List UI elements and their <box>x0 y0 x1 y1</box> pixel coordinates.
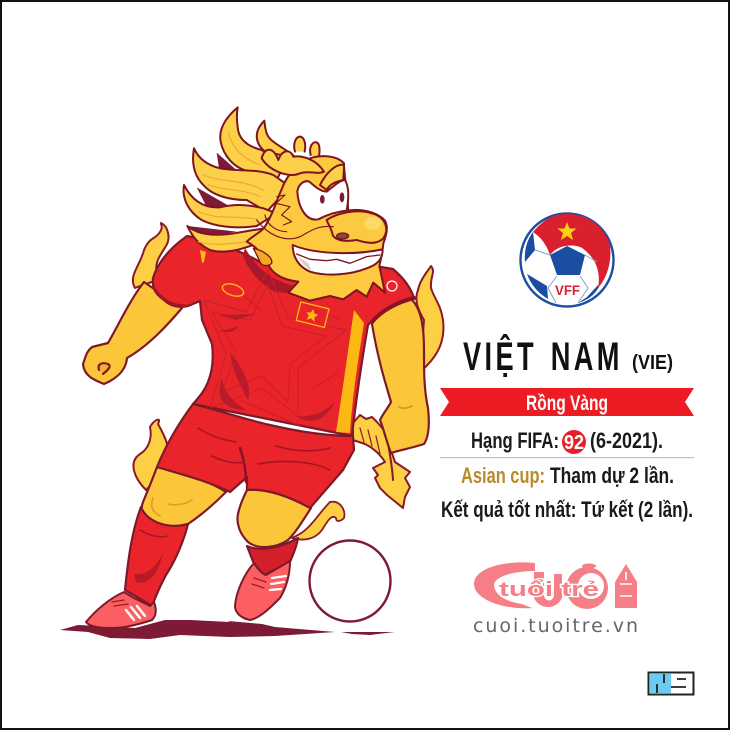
team code: (VIE) <box>632 352 673 374</box>
left arm and fist <box>83 282 182 384</box>
dark sleeve cuffs <box>155 290 186 306</box>
Tuoi Tre logo: tuổi trẻ <box>499 579 599 601</box>
neck shade <box>253 248 272 266</box>
ribbon: nickname <box>440 388 694 416</box>
crest rim and ball <box>520 214 614 306</box>
ribbon: nickname: Rồng Vàng <box>526 392 608 415</box>
left thigh <box>142 467 226 527</box>
dragon head <box>184 107 387 301</box>
flame lower <box>187 226 270 252</box>
flame middle <box>184 185 277 227</box>
right arm and fist <box>372 300 429 453</box>
shadow under the mane <box>243 248 300 294</box>
mouth with teeth <box>293 245 383 275</box>
FIFA ranking: (6-2021). <box>590 428 663 453</box>
star pattern on the shirt <box>204 270 346 426</box>
pupils <box>320 195 325 204</box>
dark hair behind <box>187 153 238 238</box>
rank badge: 92 <box>564 432 584 454</box>
crest seams <box>535 250 597 303</box>
right boot <box>235 561 290 620</box>
right sock <box>247 538 298 575</box>
flame upper <box>193 148 290 212</box>
crest centre pentagon <box>550 246 585 275</box>
flag patch <box>296 302 329 327</box>
website: cuoi.tuoitre.vn <box>473 615 638 637</box>
flame crest top <box>257 121 297 158</box>
flame: left hip <box>133 420 168 490</box>
crest red sweep <box>533 214 610 288</box>
crest initials: VFF <box>555 283 580 298</box>
brand badge <box>221 281 245 299</box>
flame top <box>220 107 285 180</box>
crest blue panels <box>525 232 599 303</box>
Asian cup line <box>461 463 674 488</box>
right thigh <box>237 490 311 547</box>
FIFA ranking <box>471 428 663 454</box>
crest star <box>558 222 576 240</box>
artist mark N9 <box>648 672 694 694</box>
illustration: golden dragon footballer <box>60 107 443 639</box>
brow plates <box>262 150 324 175</box>
eyes <box>297 180 348 220</box>
sleeve badge <box>387 281 397 291</box>
Asian cup line: Asian cup: <box>461 463 545 488</box>
yellow side stripe <box>336 310 364 433</box>
flame: right shoulder <box>416 266 443 372</box>
Asian cup line: Tham dự 2 lần. <box>550 463 674 488</box>
strands in the hair <box>198 133 263 244</box>
flame: left shoulder <box>133 223 168 288</box>
shorts <box>157 404 354 508</box>
left sock <box>125 507 188 606</box>
nostril <box>337 233 349 239</box>
football outline <box>310 540 390 622</box>
Tuoi Tre logo <box>474 562 637 609</box>
face and mane <box>247 156 387 301</box>
title: VIỆT NAM <box>463 333 623 379</box>
ground shadow <box>60 620 395 639</box>
VFF crest <box>520 214 614 306</box>
FIFA ranking: Hạng FIFA: <box>471 428 559 453</box>
left boot <box>86 592 156 628</box>
shirt <box>153 236 414 436</box>
snout <box>327 211 386 243</box>
tail tip behind the right leg <box>292 502 344 540</box>
tail <box>353 415 410 508</box>
whisker <box>257 215 333 239</box>
